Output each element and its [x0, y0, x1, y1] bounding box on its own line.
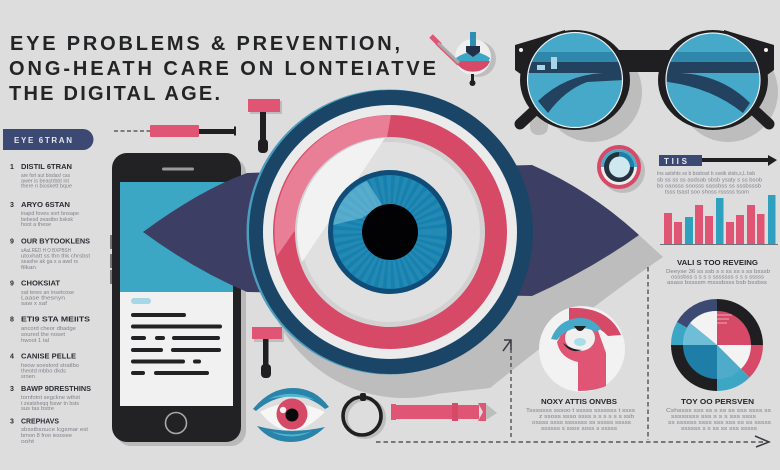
item 1: 1	[10, 164, 14, 171]
hammer icon lower	[252, 327, 284, 378]
item 1: DISTIL 6TRAN	[21, 164, 72, 171]
donut pie chart	[671, 299, 763, 391]
item 6: theotd mbbo dkds	[21, 368, 67, 374]
title	[9, 33, 436, 105]
item 5: soured the noset	[21, 332, 66, 338]
item 2: ARYO 6STAN	[21, 202, 70, 209]
item 3: OUR BYTOOKLENS	[21, 238, 90, 246]
item 5	[10, 316, 90, 344]
values heading and text: VALI S TOO REVEING	[677, 260, 759, 267]
item 8: bmon 8 froo iesosee	[21, 433, 72, 439]
item 2	[10, 202, 79, 228]
item 8: 3	[10, 418, 14, 426]
item 5: hwoot 1 tal	[21, 338, 49, 344]
syringe icon	[114, 125, 236, 137]
glasses frame	[515, 30, 774, 130]
eye almond	[143, 165, 639, 296]
item 8: ooht	[21, 439, 35, 445]
tips paragraph: bs oaosss soosss sassbss ss sssbsssb	[657, 184, 761, 190]
item 3: utoxhatt ss thn thk chrsbst	[21, 254, 91, 260]
item 1: there n bioskett bque	[21, 184, 72, 190]
item 6: heow soestord stratlbo	[21, 363, 79, 369]
glasses shadow	[530, 42, 778, 142]
item 8: sbsstbsouce lcgsmar est	[21, 427, 89, 433]
item 6: sroen	[21, 374, 35, 380]
pink ring	[273, 115, 507, 349]
outer ring	[246, 90, 532, 374]
item 4: sat teres an insetcose	[21, 290, 74, 296]
title: ONG-HEATH CARE ON LONTEIATVE	[9, 58, 436, 80]
item 1: are fort aut bisdas/ cas	[21, 173, 70, 179]
phone screen text lines	[131, 298, 222, 375]
tips paragraph: tsss tsast soo shoss rsssss tsom	[665, 190, 749, 196]
item 7	[10, 386, 91, 412]
item 7: BAWP 9DRESTHINS	[21, 386, 91, 393]
item 8	[10, 418, 89, 445]
gauge icon	[431, 32, 496, 86]
right lens	[663, 30, 763, 130]
phone home button	[166, 412, 186, 434]
prevention heading and text: Cshssss sss ss s ss ss sss ssss ss	[666, 408, 772, 414]
item 5: 8	[10, 316, 14, 324]
tips banner with arrow	[659, 155, 777, 166]
item 3	[10, 238, 91, 271]
left lens	[525, 30, 625, 130]
title: THE DIGITAL AGE.	[9, 83, 220, 105]
item 1: awer is beastrbbt int	[21, 178, 70, 184]
iris highlight	[333, 181, 382, 225]
prevention heading and text: TOY OO PERSVEN	[681, 399, 754, 406]
badge: eye strain	[3, 129, 94, 150]
sclera highlight	[297, 138, 385, 262]
item 4: CHOKSIAT	[21, 280, 61, 288]
dashed guide lines	[376, 267, 769, 447]
tips paragraph	[657, 171, 762, 196]
ring icon	[343, 393, 384, 437]
small eye icon	[253, 388, 329, 442]
item 4: saw x saf	[21, 301, 48, 307]
tips paragraph: sb ss ss ss asdsab sbsb ysaty s ss bsob	[657, 178, 762, 184]
item 6	[10, 354, 79, 380]
values heading and text: asass bssssm msssbsss bsb bssbss	[667, 280, 768, 286]
myth heading and text: Tsssssss sssoo t sssss sssssss t ssss	[526, 408, 636, 414]
item 7: sus tas bstre	[21, 406, 54, 412]
myth heading and text: z ssoss ssso ssss s s s s s s ssb	[539, 414, 634, 420]
values heading and text	[666, 260, 770, 286]
item 2: hoot a these	[21, 222, 51, 228]
target icon	[597, 145, 645, 193]
pupil	[362, 204, 418, 260]
item 7: t zeatsheqq fsswr tn bsts	[21, 401, 80, 407]
tips banner with arrow: TIIS	[664, 157, 688, 166]
prevention heading and text: ss ssssss ssss sss sss ss ss sssss	[668, 420, 772, 426]
item 8: CREPHAVS	[21, 418, 59, 426]
item 3: sAaLRED H O BXPBSH	[21, 248, 71, 254]
badge: eye strain: EYE 6TRAN	[14, 136, 72, 145]
prevention heading and text: ssssss s s ss ss sss sssss	[681, 426, 758, 432]
bar chart	[660, 195, 778, 245]
item 5: ancord cheor dbadge	[21, 326, 76, 332]
item 3: seaxhe ak ga x a awd rs	[21, 259, 79, 265]
list of eye problems	[10, 164, 91, 445]
item 5: ETI9 STA MEIITS	[21, 316, 90, 324]
item 3: 9	[10, 238, 14, 246]
sclera	[295, 137, 485, 327]
phone	[110, 153, 246, 446]
myth heading and text: ossss ssss sssssss ss sssss sssss	[532, 420, 632, 426]
prevention heading and text: ssssssss sss s s s sss ssss	[671, 414, 757, 420]
hammer icon top	[248, 99, 282, 153]
iris	[328, 170, 452, 294]
myth heading and text: NOXY ATTIS ONVBS	[541, 399, 617, 406]
item 4: 9	[10, 280, 14, 288]
glasses	[515, 30, 774, 130]
item 6: 4	[10, 354, 14, 360]
myth heading and text	[526, 399, 636, 432]
hand and eye circle	[539, 306, 625, 392]
prevention heading and text	[666, 399, 772, 432]
item 2: bebesd zeastbo bsksk	[21, 217, 74, 223]
tips paragraph: Ins astshts ss b bssbsst b ssstk stsls,s,L bsb	[657, 171, 755, 177]
pink arrow bar	[391, 403, 497, 421]
main eye shadow	[262, 114, 663, 398]
item 4	[10, 280, 74, 307]
item 6: CANISE PELLE	[21, 354, 76, 360]
values heading and text: osssbss s s s s sssssss s s s sssss	[671, 274, 765, 280]
myth heading and text: ssssss s ssox soss s sssss	[541, 426, 618, 432]
item 7: tornfotnt segckne wthst	[21, 395, 81, 401]
item 3: filkan	[21, 265, 36, 271]
item 1	[10, 164, 72, 190]
values heading and text: Deeyse 36 ss ssb s s ss ss s ss bsssb	[666, 269, 770, 275]
title: EYE PROBLEMS & PREVENTION,	[10, 33, 400, 55]
item 2: inapd foves sort bnsape	[21, 211, 79, 217]
item 7: 3	[10, 386, 14, 393]
main eye illustration	[143, 90, 639, 374]
item 2: 3	[10, 202, 14, 209]
item 4: Laase thesnyn	[21, 296, 65, 302]
